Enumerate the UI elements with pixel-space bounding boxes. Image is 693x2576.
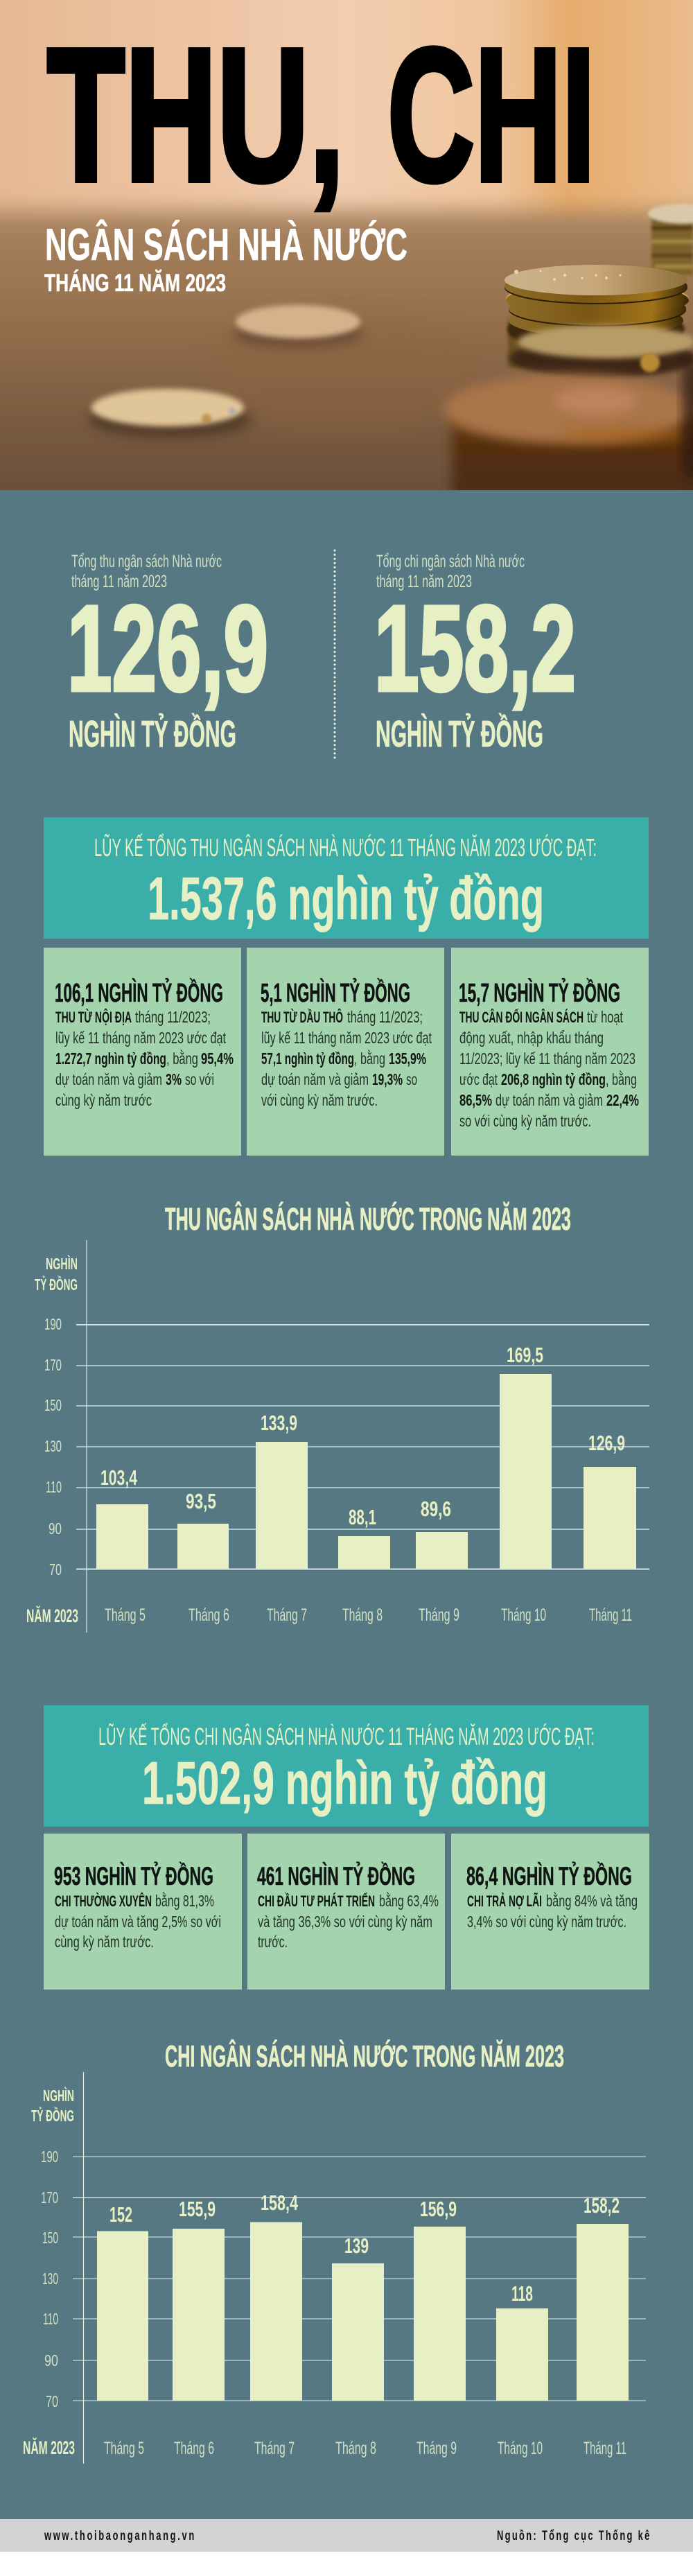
y axis labels: 70 — [46, 2392, 58, 2410]
card: interest payment — [451, 1834, 649, 1990]
revenue unit: NGHÌN TỶ ĐỒNG — [69, 713, 236, 755]
panel: cumulative revenue banner — [44, 817, 649, 939]
month labels — [105, 1605, 632, 1625]
card body — [258, 1892, 439, 1951]
card body: 22,4% — [606, 1091, 639, 1109]
card body: dự toán năm và giảm — [55, 1070, 162, 1088]
card body: tháng 11/2023; — [135, 1008, 211, 1026]
card body: và tăng 36,3% so với cùng kỳ năm — [258, 1913, 432, 1931]
y axis labels: 70 — [49, 1560, 62, 1578]
card body: cùng kỳ năm trước — [55, 1091, 152, 1109]
panel: cumulative expenditure banner — [44, 1705, 649, 1827]
card body: 206,8 nghìn tỷ đồng — [501, 1070, 606, 1088]
stat: monthly revenue — [67, 552, 268, 755]
axis unit: TỶ ĐỒNG — [31, 2105, 74, 2125]
card body: CHI TRẢ NỢ LÃI — [467, 1892, 542, 1910]
value labels: 89,6 — [421, 1497, 451, 1521]
value labels: 139 — [344, 2234, 369, 2258]
card: development investment — [247, 1834, 445, 1990]
expenditure label: Tổng chi ngân sách Nhà nước — [376, 552, 525, 571]
month labels: Tháng 8 — [335, 2439, 376, 2458]
card body: cùng kỳ năm trước. — [55, 1933, 154, 1951]
footer bar — [0, 2519, 693, 2552]
y axis labels: 130 — [42, 2270, 58, 2288]
card body — [55, 1008, 234, 1109]
revenue label: Tổng thu ngân sách Nhà nước — [71, 552, 222, 571]
bar chart: expenditure 2023 — [23, 2072, 646, 2464]
value labels — [109, 2191, 620, 2306]
card body: , bằng — [354, 1050, 385, 1068]
value labels: 155,9 — [179, 2197, 216, 2221]
card: crude oil revenue — [247, 948, 444, 1156]
card: recurrent expenditure — [44, 1834, 242, 1990]
axis unit: NGHÌN — [46, 1254, 78, 1273]
card body: CHI ĐẦU TƯ PHÁT TRIỂN — [258, 1892, 375, 1910]
y axis labels: 130 — [44, 1437, 62, 1455]
month labels: Tháng 10 — [501, 1605, 546, 1625]
y axis labels: 90 — [44, 2351, 58, 2369]
month labels: Tháng 11 — [584, 2439, 626, 2458]
y axis labels: 190 — [44, 1315, 62, 1333]
y axis labels: 110 — [43, 2310, 58, 2328]
month labels: Tháng 7 — [254, 2439, 295, 2458]
y axis labels: 90 — [49, 1520, 62, 1538]
footer website: www.thoibaonganhang.vn — [44, 2529, 194, 2543]
hero subtitle: THÁNG 11 NĂM 2023 — [44, 269, 226, 297]
axis unit — [35, 1254, 78, 1294]
month labels: Tháng 9 — [419, 1605, 459, 1625]
card body: lũy kế 11 tháng năm 2023 ước đạt — [261, 1029, 432, 1047]
value labels: 126,9 — [588, 1431, 625, 1455]
month labels: Tháng 6 — [188, 1605, 229, 1625]
value labels: 158,4 — [261, 2191, 299, 2215]
card body: CHI THƯỜNG XUYÊN — [55, 1892, 152, 1910]
dotted divider — [334, 550, 335, 761]
card body: từ hoạt — [587, 1008, 623, 1026]
month labels: Tháng 6 — [174, 2439, 214, 2458]
vertical axis — [86, 1240, 87, 1633]
y axis labels: 190 — [41, 2148, 58, 2166]
year label: NĂM 2023 — [23, 2437, 75, 2458]
expenditure unit: NGHÌN TỶ ĐỒNG — [376, 713, 543, 755]
hero subtitle: NGÂN SÁCH NHÀ NƯỚC — [45, 219, 407, 270]
main panel background — [0, 490, 693, 2519]
value labels: 118 — [511, 2281, 533, 2306]
card body: động xuất, nhập khẩu tháng — [459, 1029, 604, 1047]
card body: dự toán năm và giảm — [261, 1070, 369, 1088]
card heading: 461 NGHÌN TỶ ĐỒNG — [257, 1861, 415, 1890]
card body: 3,4% so với cùng kỳ năm trước. — [467, 1913, 626, 1931]
card: domestic revenue — [44, 948, 241, 1156]
axis unit: TỶ ĐỒNG — [35, 1274, 78, 1294]
card body: ước đạt — [459, 1070, 498, 1088]
card body: tháng 11/2023; — [347, 1008, 423, 1026]
month labels — [104, 2439, 626, 2458]
card body: so — [406, 1070, 417, 1088]
card body: THU CÂN ĐỐI NGÂN SÁCH — [459, 1008, 584, 1026]
y axis labels: 150 — [42, 2229, 58, 2247]
card body: so với cùng kỳ năm trước. — [459, 1112, 591, 1130]
value labels: 88,1 — [349, 1505, 376, 1529]
axis unit: NGHÌN — [43, 2086, 74, 2105]
hero photo: coins on a table — [0, 0, 693, 530]
card body: , bằng — [166, 1050, 198, 1068]
y axis labels: 110 — [46, 1478, 62, 1496]
card body: 135,9% — [389, 1050, 426, 1068]
stat: monthly expenditure — [374, 552, 576, 755]
card body: bằng 81,3% — [155, 1892, 214, 1910]
card body: , bằng — [606, 1070, 637, 1088]
card body: 1.272,7 nghìn tỷ đồng — [55, 1050, 166, 1068]
y axis labels: 170 — [44, 1356, 62, 1374]
expenditure label: tháng 11 năm 2023 — [376, 572, 472, 591]
card body: với cùng kỳ năm trước. — [261, 1091, 378, 1109]
value labels: 158,2 — [584, 2193, 620, 2218]
card: budget balance revenue — [451, 948, 649, 1156]
month labels: Tháng 9 — [416, 2439, 457, 2458]
value labels: 93,5 — [186, 1489, 216, 1513]
expenditure value: 158,2 — [374, 581, 576, 717]
bars — [97, 2222, 629, 2401]
value labels — [100, 1343, 625, 1529]
card body: THU TỪ DẦU THÔ — [261, 1009, 343, 1026]
card body: THU TỪ NỘI ĐỊA — [55, 1009, 132, 1026]
value labels: 156,9 — [420, 2197, 457, 2221]
card body: bằng 84% và tăng — [546, 1892, 638, 1910]
card body: bằng 63,4% — [379, 1892, 439, 1910]
footer source: Nguồn: Tổng cục Thống kê — [497, 2529, 649, 2543]
card body — [459, 1008, 639, 1130]
month labels: Tháng 10 — [498, 2439, 543, 2458]
vertical axis — [83, 2072, 85, 2464]
card body — [467, 1892, 638, 1931]
card body: so với — [185, 1070, 214, 1088]
value labels: 133,9 — [261, 1411, 297, 1435]
card body: 19,3% — [372, 1070, 403, 1088]
month labels: Tháng 5 — [105, 1605, 146, 1625]
card body — [55, 1892, 221, 1951]
card body: 95,4% — [201, 1050, 234, 1068]
card heading: 5,1 NGHÌN TỶ ĐỒNG — [261, 977, 410, 1008]
card body — [261, 1008, 432, 1109]
card body: 3% — [166, 1070, 182, 1088]
card body: 57,1 nghìn tỷ đồng — [261, 1050, 354, 1068]
expenditure label — [376, 552, 525, 591]
grid lines — [73, 2157, 646, 2401]
revenue label: tháng 11 năm 2023 — [71, 572, 167, 591]
year label: NĂM 2023 — [26, 1605, 78, 1626]
y axis labels — [44, 1315, 62, 1578]
y axis labels: 150 — [44, 1396, 62, 1414]
month labels: Tháng 11 — [589, 1605, 632, 1625]
hero subtitle — [44, 219, 407, 297]
value labels: 103,4 — [100, 1465, 138, 1490]
month labels: Tháng 7 — [267, 1605, 307, 1625]
value labels: 169,5 — [507, 1343, 543, 1367]
month labels: Tháng 5 — [104, 2439, 144, 2458]
revenue label — [71, 552, 222, 591]
y axis labels: 170 — [41, 2188, 58, 2207]
hero title: THU, CHI: THU, — [47, 9, 344, 220]
card heading: 106,1 NGHÌN TỶ ĐỒNG — [55, 977, 223, 1008]
bars — [96, 1374, 636, 1569]
axis unit — [31, 2086, 74, 2125]
value labels: 152 — [109, 2202, 132, 2227]
bar chart: revenue 2023 — [26, 1240, 649, 1633]
y axis labels — [41, 2148, 58, 2410]
card body: lũy kế 11 tháng năm 2023 ước đạt — [55, 1029, 226, 1047]
month labels: Tháng 8 — [342, 1605, 383, 1625]
card body: dự toán năm và tăng 2,5% so với — [55, 1913, 221, 1931]
revenue value: 126,9 — [67, 581, 268, 717]
card body: 86,5% — [459, 1091, 492, 1109]
card body: trước. — [258, 1933, 288, 1951]
card body: dự toán năm và giảm — [495, 1091, 603, 1109]
card heading: 953 NGHÌN TỶ ĐỒNG — [54, 1861, 213, 1890]
grid lines — [76, 1325, 649, 1569]
